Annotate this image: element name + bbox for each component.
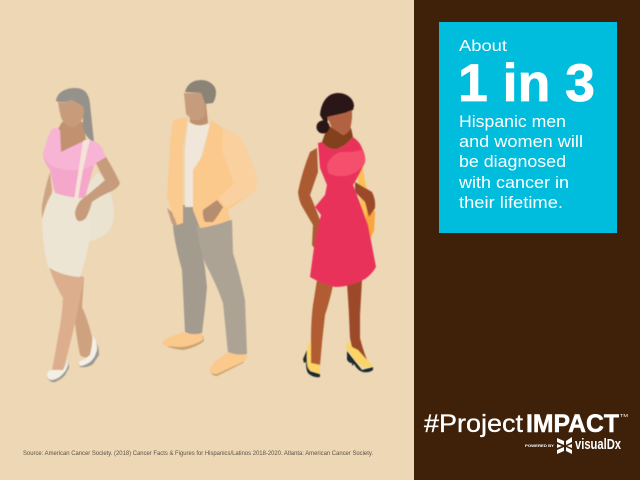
callout: cyan statistic box bbox=[439, 22, 617, 233]
front trouser leg bbox=[196, 220, 247, 355]
front leg bbox=[49, 267, 84, 371]
text: source citation: Source: American Cancer Society. (2018) Cancer Facts & Figures for Hispanics/Latinos 2018-2020. Atlanta: American Cancer Society. bbox=[23, 451, 373, 457]
dress highlight bbox=[327, 150, 365, 176]
hair bbox=[320, 93, 354, 127]
left hand bbox=[167, 208, 177, 226]
jacket sleeve bbox=[219, 128, 257, 208]
shoulder bag bbox=[76, 172, 114, 242]
front leg bbox=[310, 280, 333, 365]
shoes bbox=[162, 332, 247, 374]
shoes bbox=[47, 343, 99, 382]
figure: woman in red dress, full colour bbox=[298, 93, 376, 377]
logo: powered by visualDx bbox=[525, 436, 621, 454]
back leg bbox=[68, 277, 92, 358]
logo: ProjectIMPACT hashtag bbox=[424, 410, 628, 438]
bag lower bbox=[366, 205, 375, 240]
red dress bbox=[310, 137, 376, 287]
face bbox=[58, 100, 84, 127]
text: about: About bbox=[459, 38, 508, 55]
panel: beige illustration background bbox=[0, 0, 414, 480]
top highlight bbox=[43, 128, 106, 170]
bag strap bbox=[74, 140, 90, 200]
back arm bbox=[42, 172, 52, 224]
text: 1 in 3: 1 in 3 bbox=[458, 54, 595, 113]
logo: powered by visualDx: visualDx bbox=[575, 436, 621, 453]
bag bbox=[353, 135, 375, 240]
figure: faded woman in pink top and white skirt bbox=[42, 88, 120, 382]
text: description: and women will bbox=[459, 133, 583, 151]
figure: faded man in yellow jacket and grey trousers bbox=[162, 80, 257, 376]
pink top bbox=[43, 128, 106, 198]
front arm bbox=[75, 157, 120, 221]
logo: ProjectIMPACT hashtag: #Project bbox=[424, 410, 523, 438]
face bbox=[184, 93, 205, 120]
shoes bbox=[307, 340, 373, 374]
neck and chest bbox=[57, 122, 86, 154]
white t-shirt bbox=[185, 122, 210, 207]
neck and chest bbox=[322, 125, 353, 149]
hair bbox=[56, 88, 94, 142]
front arm bbox=[298, 148, 324, 253]
logo: ProjectIMPACT hashtag: TM bbox=[620, 413, 628, 418]
neck bbox=[190, 103, 208, 125]
text: description: with cancer in bbox=[458, 174, 569, 192]
text: description bbox=[458, 113, 583, 212]
logo: powered by visualDx: POWERED BY bbox=[525, 444, 555, 448]
shoe soles and heels bbox=[303, 350, 373, 377]
logo: ProjectIMPACT hashtag: IMPACT bbox=[526, 410, 619, 438]
text: description: be diagnosed bbox=[459, 153, 566, 171]
shoe soles bbox=[162, 336, 247, 376]
hair bun bbox=[316, 120, 330, 134]
face bbox=[327, 110, 352, 135]
hair bbox=[185, 80, 216, 104]
jacket left side bbox=[167, 117, 188, 225]
back leg bbox=[347, 280, 367, 360]
back arm bbox=[355, 182, 375, 217]
jacket right side bbox=[193, 120, 257, 228]
skirt bbox=[42, 190, 90, 277]
back trouser leg bbox=[173, 205, 207, 334]
icon: visualDx mark bbox=[557, 437, 572, 454]
text: description: Hispanic men bbox=[459, 113, 566, 131]
right hand bbox=[203, 200, 223, 222]
text: description: their lifetime. bbox=[459, 194, 563, 212]
panel: brown sidebar bbox=[414, 0, 640, 480]
